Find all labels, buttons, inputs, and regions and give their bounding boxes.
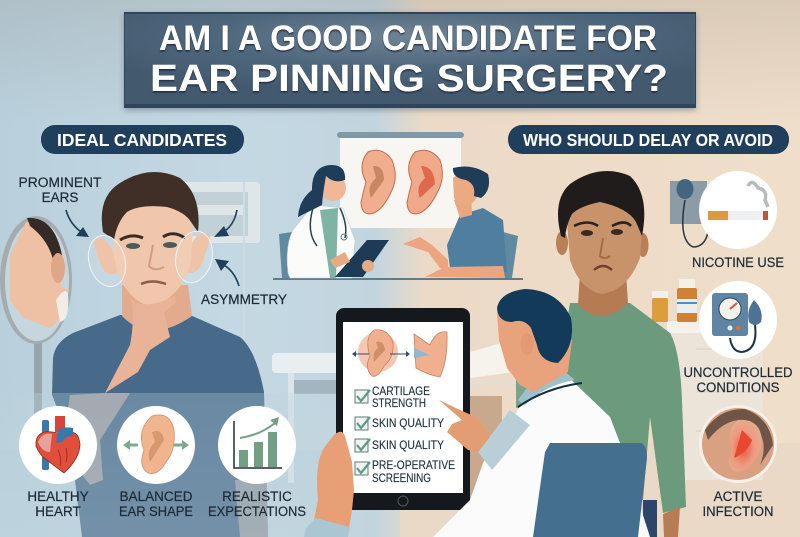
ear (520, 333, 534, 355)
label: realistic expectations: REALISTIC (222, 489, 292, 504)
label: balanced ear shape: EAR SHAPE (119, 504, 193, 519)
wall blood pressure device (670, 179, 708, 247)
label: active infection: INFECTION (702, 504, 774, 519)
label: healthy heart (27, 489, 89, 519)
hair (558, 171, 644, 238)
translucent lower band, left, with forearm and sleeve (0, 393, 336, 537)
label: healthy heart: HEALTHY (27, 489, 89, 504)
checklist: SCREENING (372, 471, 431, 485)
doctor viewed from behind (433, 289, 650, 537)
callout: prominent ears: EARS (42, 190, 78, 205)
heading: who should delay or avoid (508, 125, 789, 154)
left man: thoughtful candidate (52, 172, 268, 537)
title banner: EAR PINNING SURGERY? (150, 58, 668, 100)
ears (556, 231, 568, 255)
jeans (643, 500, 657, 537)
checklist: SKIN QUALITY (372, 438, 444, 452)
title banner: AM I A GOOD CANDIDATE FOR (159, 19, 657, 58)
heading: ideal candidates (41, 125, 244, 154)
sleeve cuff (478, 410, 530, 470)
facial features (574, 222, 631, 226)
label: realistic expectations: EXPECTATIONS (208, 504, 306, 519)
neck and face (497, 300, 572, 392)
checklist: PRE-OPERATIVE (372, 458, 455, 472)
arrow: right ear (214, 210, 237, 237)
callout: prominent ears: PROMINENT (18, 175, 102, 190)
tablet with checklist (336, 308, 470, 510)
heading: who should delay or avoid: WHO SHOULD DELAY OR AVOID (523, 130, 773, 150)
doctor (287, 205, 355, 278)
heading: ideal candidates: IDEAL CANDIDATES (57, 130, 227, 150)
bed and cabinet behind tablet, right (470, 342, 532, 506)
hand (663, 507, 680, 537)
callout: prominent ears (18, 175, 102, 205)
collar (518, 370, 575, 405)
eyes and brows (120, 234, 185, 240)
patient (447, 208, 507, 272)
table line (273, 278, 523, 280)
bed behind tablet, left (272, 353, 342, 483)
label: realistic expectations (208, 489, 306, 519)
white coat (433, 372, 650, 537)
label: active infection: ACTIVE (714, 489, 762, 504)
neck (578, 272, 628, 316)
hair (497, 289, 572, 363)
hair (102, 172, 199, 240)
pointing hand (439, 400, 490, 452)
cuff and coat sleeve (304, 518, 350, 537)
right man: concerned patient (555, 171, 686, 537)
label: balanced ear shape: BALANCED (120, 489, 193, 504)
doctor chair (279, 232, 296, 278)
right icon column (684, 171, 793, 519)
neck (122, 285, 192, 330)
hand on chin (105, 296, 176, 393)
arrow: prominent ears (66, 210, 89, 237)
icon: healthy heart (19, 406, 97, 484)
callout: asymmetry: ASYMMETRY (201, 292, 287, 307)
icon: balanced ear shape (117, 406, 195, 484)
arrow: asymmetry (215, 259, 239, 286)
ears (94, 238, 118, 274)
checklist (355, 384, 455, 485)
ear highlight ovals (83, 231, 131, 291)
blue chair back (533, 443, 647, 537)
label: balanced ear shape (119, 489, 193, 519)
icon: realistic expectations (218, 406, 296, 484)
checklist: SKIN QUALITY (372, 416, 444, 430)
left icon row (19, 406, 306, 519)
label: uncontrolled conditions: UNCONTROLLED (684, 365, 793, 380)
title banner (124, 12, 696, 110)
mirror with reflection (0, 216, 72, 450)
medicine bottles (652, 279, 697, 322)
label: uncontrolled conditions (684, 365, 793, 395)
icon: cigarette (699, 171, 777, 249)
tablet ear diagrams (352, 330, 447, 377)
icon: infected ear (699, 405, 777, 483)
label: uncontrolled conditions: CONDITIONS (696, 380, 780, 395)
face (113, 198, 193, 305)
poster with ears (337, 132, 464, 138)
patient chair (503, 232, 518, 278)
checklist: STRENGTH (372, 396, 426, 410)
checklist: CARTILAGE (372, 384, 430, 398)
shirt and sleeves (52, 315, 268, 537)
sweater (555, 303, 686, 513)
icon: blood pressure monitor (699, 281, 777, 359)
consultation scene (273, 132, 523, 280)
drawer cabinet (667, 321, 765, 480)
face (566, 198, 642, 294)
label: healthy heart: HEART (35, 504, 81, 519)
wall cabinet behind left man (183, 182, 260, 394)
label: active infection (702, 489, 774, 519)
hand holding tablet (314, 432, 354, 528)
label: nicotine use: NICOTINE USE (692, 255, 784, 270)
